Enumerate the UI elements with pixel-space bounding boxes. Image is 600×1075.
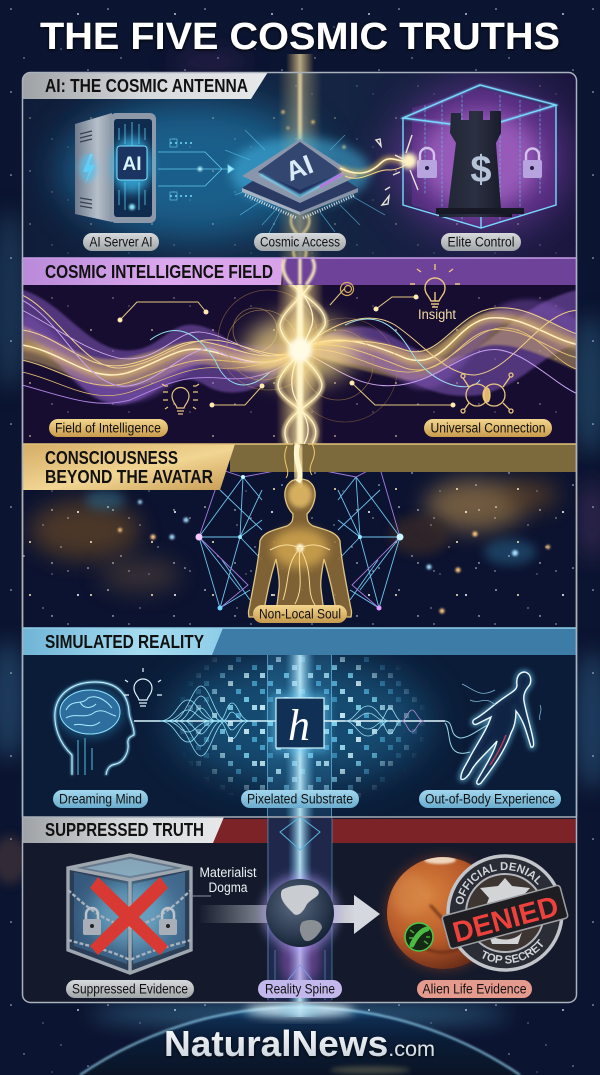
heading: AI the cosmic antenna: AI: THE COSMIC ANTENNA [45,76,248,96]
traces around chip [225,130,385,235]
heading: simulated reality [22,628,577,655]
waves [22,290,580,422]
icon: denied stamp [442,854,568,972]
lightning: chip to vault [340,135,418,205]
text: Materialist Dogma: Materialist [200,865,257,880]
icon: AI chip [230,137,370,218]
network: right geometry [328,472,404,610]
signal wave left [134,686,276,756]
icon: vault cube [403,85,556,228]
heading: suppressed truth [22,817,577,843]
icon: red X [90,877,168,955]
panel: consciousness beyond the avatar [22,444,577,628]
arrow: evidence to mars [198,895,380,934]
icon: out-of-body figure [461,672,541,784]
icon: black tower with dollar [436,111,524,217]
label: Pixelated Substrate: Pixelated Substrate [247,792,353,806]
label: Alien Life Evidence: Alien Life Evidence [422,982,526,996]
icon: locked cube [68,855,191,973]
callout lines [118,288,456,408]
icon: planck h box [272,694,328,752]
energy from crown [285,444,314,482]
padlock left [83,908,101,935]
title: THE FIVE COSMIC TRUTHS [40,16,560,58]
panel: AI the cosmic antenna [22,72,577,258]
heading: suppressed truth: SUPPRESSED TRUTH [45,820,204,840]
heading: simulated reality: SIMULATED REALITY [45,632,204,652]
icon: denied stamp: DENIED [449,890,562,949]
icon: universal connection [461,373,513,413]
icon: mars [385,855,501,971]
heading: cosmic intelligence field [22,258,577,285]
icon: AI server [75,113,156,223]
icon: AI server: AI [122,154,142,175]
signal wave right [324,706,490,753]
icon: earth [262,875,338,951]
icon: field of intelligence bulb [162,384,199,414]
panel: simulated reality [22,628,577,817]
top light beam above panel [286,54,314,82]
heading: AI the cosmic antenna [22,72,268,99]
label: Elite Control: Elite Control [448,234,514,250]
label: Universal Connection: Universal Connection [430,420,546,436]
label: Dreaming Mind: Dreaming Mind [59,792,142,806]
icon: brain head [55,682,134,775]
panel borders [22,72,577,1002]
heading: consciousness beyond the avatar [22,444,577,490]
central energy helix [245,258,355,444]
pixel substrate [176,657,425,798]
label: Reality Spine: Reality Spine [265,982,335,996]
label: Suppressed Evidence: Suppressed Evidence [72,982,188,996]
earth horizon [80,1002,520,1075]
icon: denied stamp: TOP SECRET [482,939,544,964]
arrows: server to chip [158,139,234,200]
icon: AI chip: AI [281,149,317,187]
figure: golden avatar [249,479,351,617]
gold sparkles above chip [281,110,346,149]
label: Out-of-Body Experience: Out-of-Body Experience [425,792,555,806]
panel: cosmic intelligence field [22,258,580,444]
icon: golden sphere [340,282,354,296]
padlock right [159,908,177,935]
network: left geometry [196,470,280,610]
icon: denied stamp: OFFICIAL DENIAL [456,862,540,904]
text: Insight: Insight [418,307,456,322]
nebula clouds [22,444,577,628]
central beam below panel [276,1003,324,1017]
energy over purple bar [283,258,314,285]
spine beam [267,640,332,817]
text: Materialist Dogma: Dogma [208,880,248,895]
gold swirl below chip [291,215,309,258]
heading: consciousness beyond the avatar: BEYOND THE AVATAR [45,467,213,487]
heading: consciousness beyond the avatar: CONSCIOUSNESS [45,448,178,468]
reality spine beam [267,817,332,1003]
icon: lightbulb [124,668,162,706]
label: Cosmic Access: Cosmic Access [260,234,340,250]
icon: padlock right [523,149,542,178]
label: Non-Local Soul: Non-Local Soul [259,606,341,622]
icon: black tower with dollar: $ [470,149,492,191]
label: Field of Intelligence: Field of Intelligence [55,420,161,436]
icon: padlock left [417,148,437,178]
panel: suppressed truth [23,818,576,1002]
logo: NaturalNews.com: NaturalNews .com [164,1023,435,1064]
heading: cosmic intelligence field: COSMIC INTELLIGENCE FIELD [45,262,273,282]
label: AI Server AI: AI Server AI [90,234,152,250]
icon: microbe [405,923,433,951]
icon: insight bulb [410,264,460,307]
text: Materialist Dogma [191,865,257,896]
icon: planck h box: h [288,701,310,750]
